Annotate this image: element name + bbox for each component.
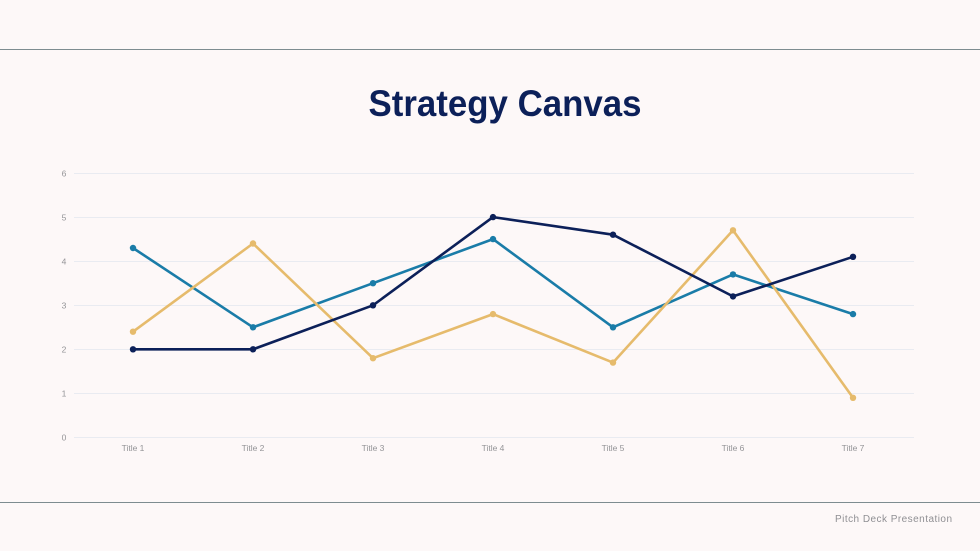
x axis labels: Title 7	[842, 443, 865, 453]
line chart	[62, 168, 914, 453]
title: Strategy Canvas	[368, 83, 642, 124]
series: blue	[130, 236, 856, 330]
x axis labels: Title 1	[122, 443, 145, 453]
y axis labels: 4	[62, 256, 67, 266]
y axis labels: 5	[62, 212, 67, 222]
footer text: Pitch Deck Presentation	[835, 514, 952, 525]
y axis labels: 1	[62, 388, 67, 398]
x axis labels: Title 4	[482, 443, 505, 453]
y axis labels: 6	[62, 168, 67, 178]
y axis labels: 3	[62, 300, 67, 310]
y axis labels: 0	[62, 432, 67, 442]
y axis labels: 2	[62, 344, 67, 354]
y axis labels	[62, 168, 67, 442]
series: navy	[130, 214, 856, 352]
series: gold	[130, 227, 856, 401]
x axis labels: Title 5	[602, 443, 625, 453]
x axis labels: Title 6	[722, 443, 745, 453]
x axis labels: Title 3	[362, 443, 385, 453]
x axis labels	[122, 443, 865, 453]
x axis labels: Title 2	[242, 443, 265, 453]
